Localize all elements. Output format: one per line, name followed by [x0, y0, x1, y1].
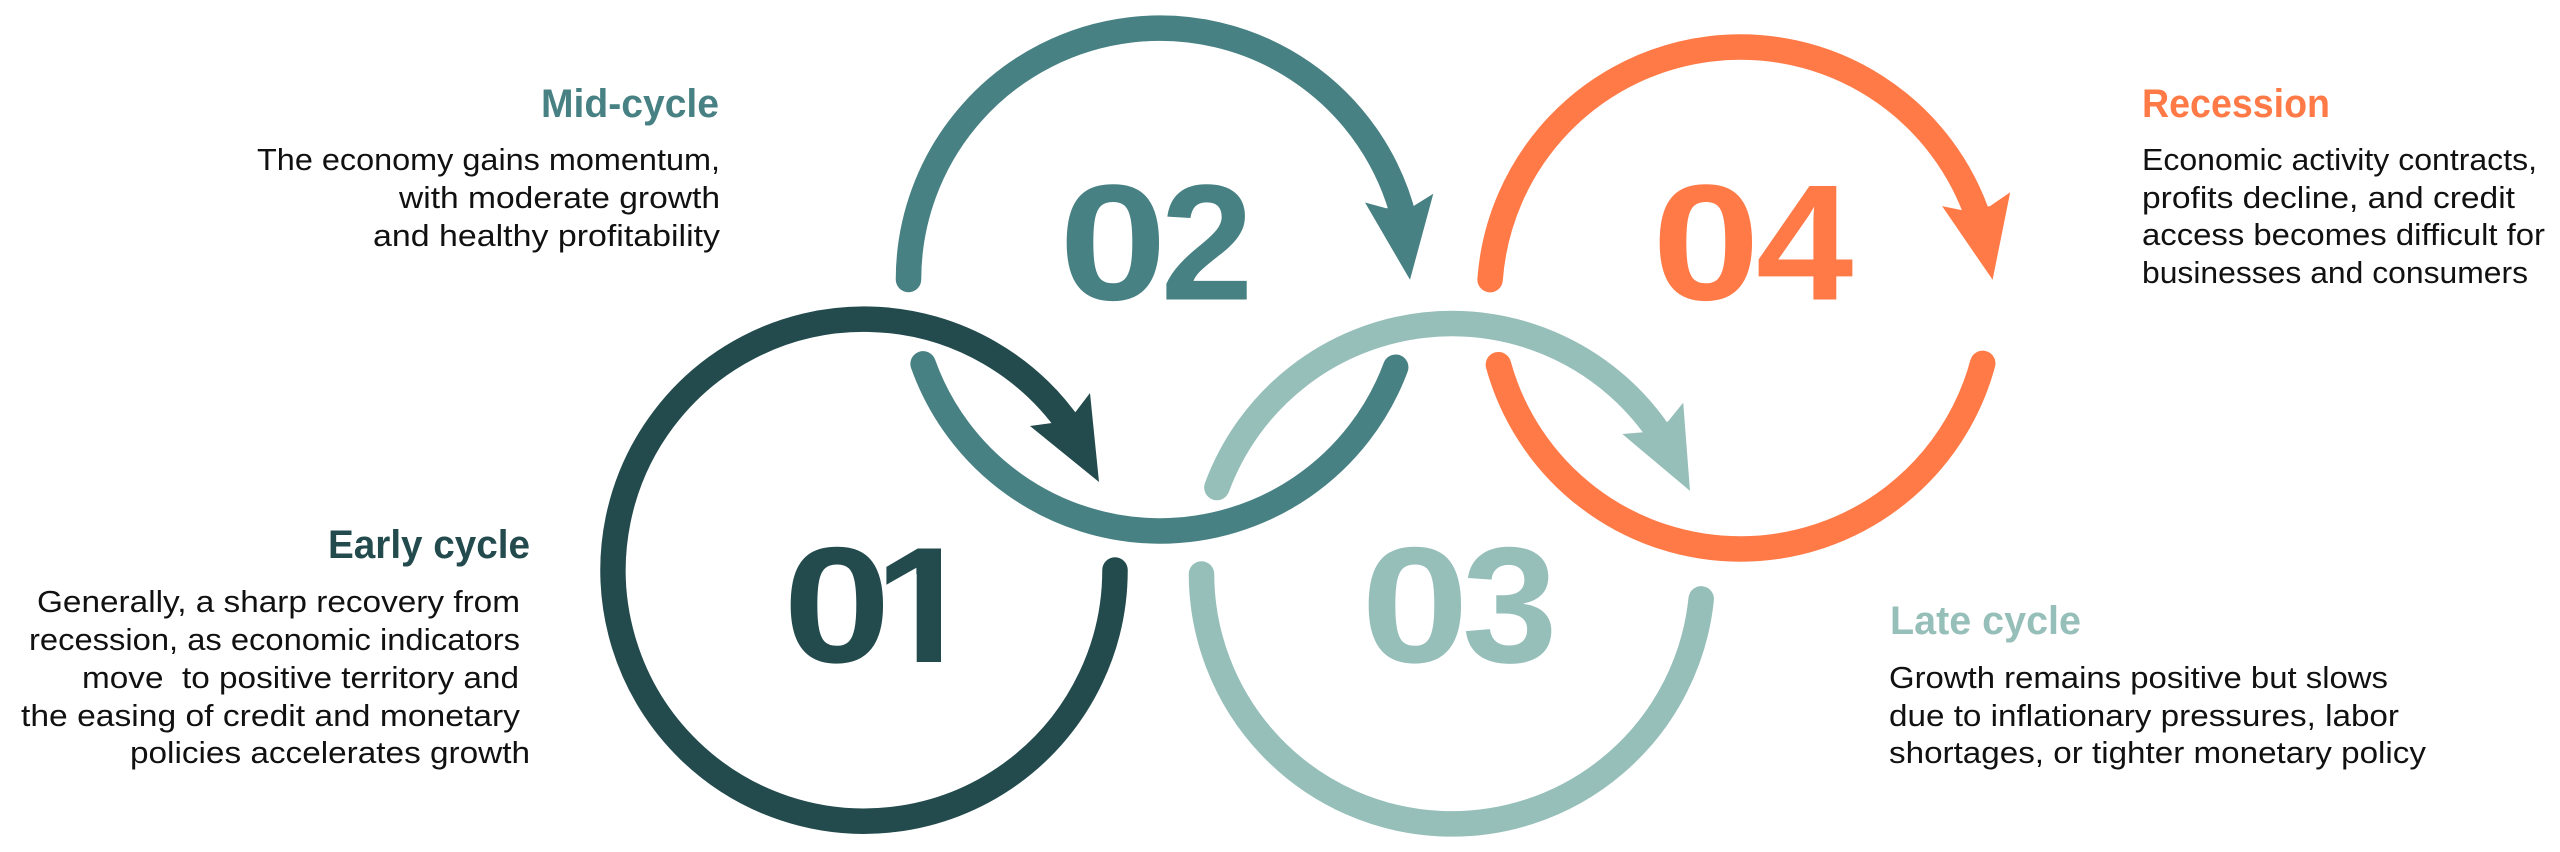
number 04: 4	[1756, 150, 1853, 334]
arc 02 lower	[923, 364, 1396, 531]
text block: early cycle	[21, 523, 530, 770]
arc 03 upper	[1217, 324, 1662, 488]
arrowhead 01	[1030, 393, 1099, 482]
heading: mid-cycle: Mid-cycle	[541, 82, 719, 126]
body: recession	[2142, 142, 2545, 290]
heading: early cycle: Early cycle	[328, 523, 530, 567]
body: mid-cycle	[257, 142, 721, 253]
number 04: 0	[1652, 150, 1760, 334]
text block: mid-cycle	[257, 82, 721, 253]
heading: late cycle: Late cycle	[1890, 599, 2081, 643]
number 01: 0	[783, 513, 891, 697]
number 03: 0	[1361, 513, 1469, 697]
body: recession: access becomes difficult for	[2142, 217, 2545, 252]
body: late cycle: Growth remains positive but slows	[1889, 660, 2388, 695]
body: recession: Economic activity contracts,	[2142, 142, 2537, 177]
number 03: 3	[1462, 513, 1558, 697]
arc 02 upper	[908, 28, 1404, 280]
arrowhead 04	[1942, 192, 2010, 280]
body: early cycle: policies accelerates growth	[130, 735, 530, 770]
heading: recession: Recession	[2142, 82, 2330, 126]
text block: recession	[2142, 82, 2545, 290]
arrowhead 03	[1622, 403, 1690, 491]
body: recession: profits decline, and credit	[2142, 180, 2515, 215]
number 02: 2	[1161, 150, 1253, 334]
body: late cycle	[1889, 660, 2427, 770]
body: late cycle: shortages, or tighter monetary policy	[1889, 735, 2427, 770]
body: early cycle	[21, 584, 530, 770]
text block: late cycle	[1889, 599, 2427, 770]
number 02: 0	[1059, 150, 1167, 334]
arc 01	[613, 319, 1115, 821]
body: late cycle: due to inflationary pressures, labor	[1889, 698, 2399, 733]
arrowhead 02	[1365, 194, 1433, 280]
arc 03 lower	[1202, 574, 1701, 824]
body: early cycle: move to positive territory and	[82, 660, 519, 695]
body: mid-cycle: with moderate growth	[398, 180, 720, 215]
body: mid-cycle: and healthy profitability	[373, 218, 721, 253]
number 01: 1	[874, 513, 975, 697]
ring 01: early cycle arrow	[613, 319, 1115, 821]
body: early cycle: recession, as economic indicators	[29, 622, 520, 657]
arc 04 upper	[1490, 47, 1979, 280]
ring 04: recession arrow	[1490, 47, 2010, 549]
body: early cycle: Generally, a sharp recovery from	[37, 584, 520, 619]
arc 04 lower	[1498, 363, 1983, 549]
ring 02: mid-cycle arrow	[908, 28, 1433, 531]
body: recession: businesses and consumers	[2142, 255, 2528, 290]
body: early cycle: the easing of credit and monetary	[21, 698, 521, 733]
ring 03: late cycle arrow	[1202, 324, 1701, 824]
body: mid-cycle: The economy gains momentum,	[257, 142, 720, 177]
